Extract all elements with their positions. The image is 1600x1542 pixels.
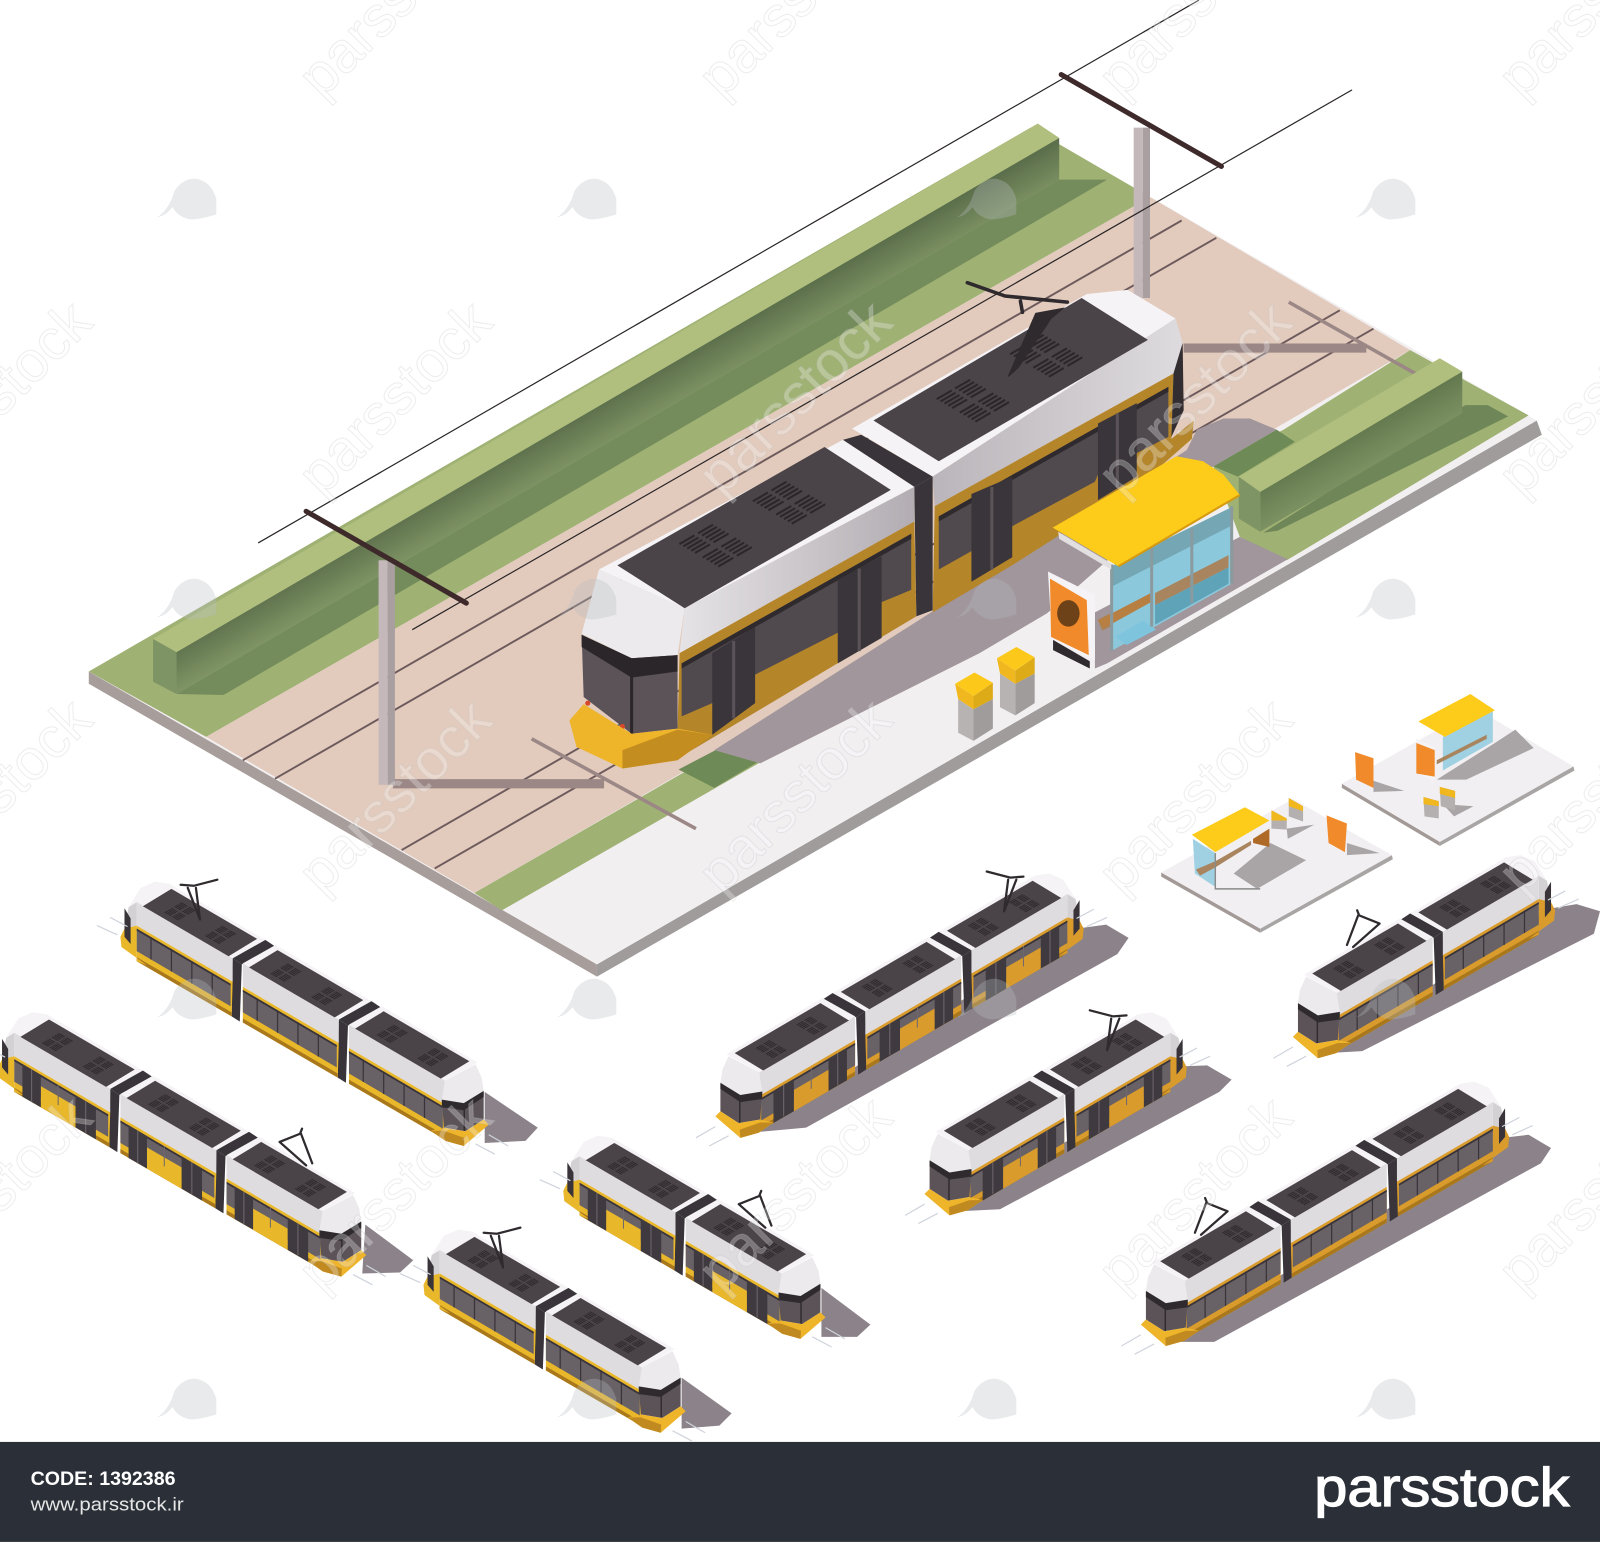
pole and crossbar shadows — [393, 302, 1415, 829]
website address: www.parsstock.ir — [30, 1493, 184, 1514]
tram windshield — [582, 635, 678, 734]
watermark: stock text: parsstock — [1086, 1084, 1304, 1303]
footer bar — [0, 1442, 1600, 1542]
hedge: long far hedge — [153, 124, 1107, 695]
watermark: stock text: parsstock — [286, 289, 504, 507]
image code: CODE: 1392386 — [31, 1468, 176, 1490]
tram pantograph — [967, 283, 1067, 377]
watermark: elephant marks — [157, 179, 1415, 1419]
bollards — [955, 647, 1035, 741]
panel: stop variant with shelter at left — [1161, 798, 1393, 933]
overhead pole: near — [379, 560, 395, 785]
hedge: short near hedge — [1239, 358, 1508, 533]
watermark: stock text: parsstock — [1086, 289, 1304, 507]
watermark: stock text: parsstock — [1086, 686, 1304, 905]
overhead crossbars and wires — [258, 0, 1352, 630]
tram bumper — [569, 704, 712, 768]
parsstock logo: parsstock — [1314, 1456, 1570, 1518]
tram rear car — [852, 290, 1194, 612]
panel: stop variant with shelter at right — [1342, 694, 1574, 846]
advertising panel — [1048, 572, 1095, 668]
main tram — [569, 283, 1194, 768]
watermark: stock text: parsstock — [686, 1084, 904, 1303]
tram: three cars, top left — [97, 880, 538, 1154]
panel: main tram stop scene — [89, 0, 1542, 977]
ground slab — [89, 128, 1542, 977]
bus shelter — [1053, 456, 1240, 651]
tram tracks — [243, 220, 1373, 868]
tram and shelter shadows — [714, 418, 1295, 763]
tram: two cars, centre — [540, 1136, 870, 1347]
watermark: stock text: parsstock — [286, 686, 504, 905]
overhead pole: far — [1134, 128, 1150, 298]
tram: three cars, bottom right — [1121, 1082, 1551, 1354]
tram: three cars, centre right — [696, 872, 1129, 1146]
watermark: stock text: parsstock — [686, 289, 904, 507]
watermark: stock text: parsstock — [686, 686, 904, 905]
tram front car — [582, 440, 916, 756]
tram: two cars, centre right lower — [905, 1010, 1232, 1224]
tram joint — [843, 435, 933, 616]
tram: three cars, bottom left — [0, 1012, 413, 1285]
tram: two cars, bottom centre — [400, 1228, 732, 1441]
watermark: stock text: parsstock — [286, 1084, 504, 1303]
tram: two cars, far right — [1273, 855, 1600, 1066]
